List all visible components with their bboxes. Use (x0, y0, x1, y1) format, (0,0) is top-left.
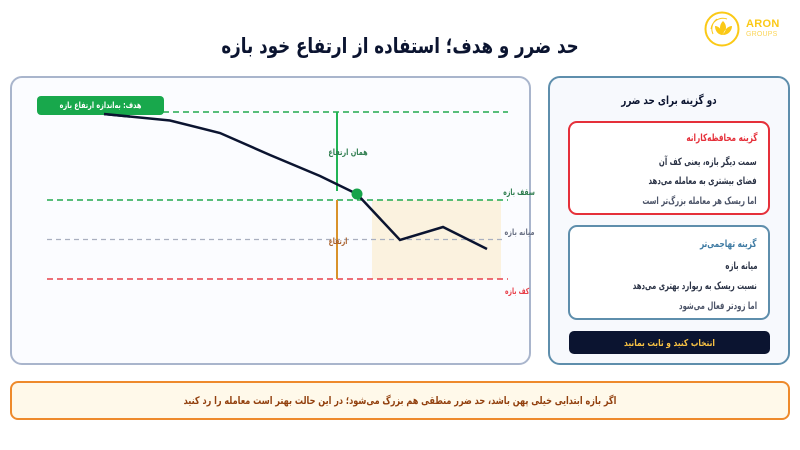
range middle line (47, 238, 505, 240)
panel: stop-loss options (548, 76, 790, 365)
breakout dot (352, 188, 362, 200)
price line start (104, 112, 130, 118)
callout (10, 381, 790, 420)
card heading: گزینه محافظه‌کارانه (686, 133, 757, 144)
logo wordmark (746, 18, 780, 38)
range zone (372, 200, 501, 279)
card: aggressive option (568, 225, 770, 320)
range floor line (47, 278, 508, 280)
option text 1: سمت دیگر بازه، یعنی کف آن (659, 157, 757, 168)
label: same height: همان ارتفاع (328, 148, 367, 158)
option text 2: فضای بیشتری به معامله می‌دهد (649, 176, 757, 187)
target pill (37, 96, 164, 115)
label: range middle: میانه بازه (505, 228, 535, 238)
label: range ceiling: سقف بازه (503, 188, 535, 198)
card heading: گزینه تهاجمی‌تر (700, 239, 757, 250)
option text 3: اما زودتر فعال می‌شود (679, 301, 757, 312)
same height vertical (336, 112, 338, 191)
target line (163, 111, 508, 113)
panel: chart (10, 76, 531, 365)
label: height: ارتفاع (329, 237, 347, 247)
option text 2: نسبت ریسک به ریوارد بهتری می‌دهد (633, 281, 757, 292)
option text 1: میانه بازه (725, 261, 757, 272)
card: conservative option (568, 121, 770, 215)
callout text: اگر بازه ابتدایی خیلی پهن باشد، حد ضرر منطقی هم بزرگ می‌شود؛ در این حالت بهتر است معامله را رد کنید (184, 395, 616, 407)
height vertical (336, 200, 338, 279)
icon: wheat leaf circle (704, 12, 740, 46)
title: حد ضرر و هدف؛ استفاده از ارتفاع خود بازه (221, 34, 579, 58)
label: range floor: کف بازه (505, 287, 529, 297)
button label: انتخاب کنید و ثابت بمانید (624, 338, 714, 349)
range ceiling line (47, 199, 508, 201)
price line (104, 114, 487, 249)
button (568, 331, 770, 354)
logo wordmark: GROUPS (746, 31, 778, 38)
panel heading: دو گزینه برای حد ضرر (621, 93, 717, 107)
target pill label: هدف: به‌اندازه ارتفاع بازه (60, 101, 141, 111)
logo wordmark: ARON (746, 18, 780, 30)
option text 3: اما ریسک هر معامله بزرگ‌تر است (643, 196, 757, 207)
logo: Aron Groups (704, 12, 780, 46)
